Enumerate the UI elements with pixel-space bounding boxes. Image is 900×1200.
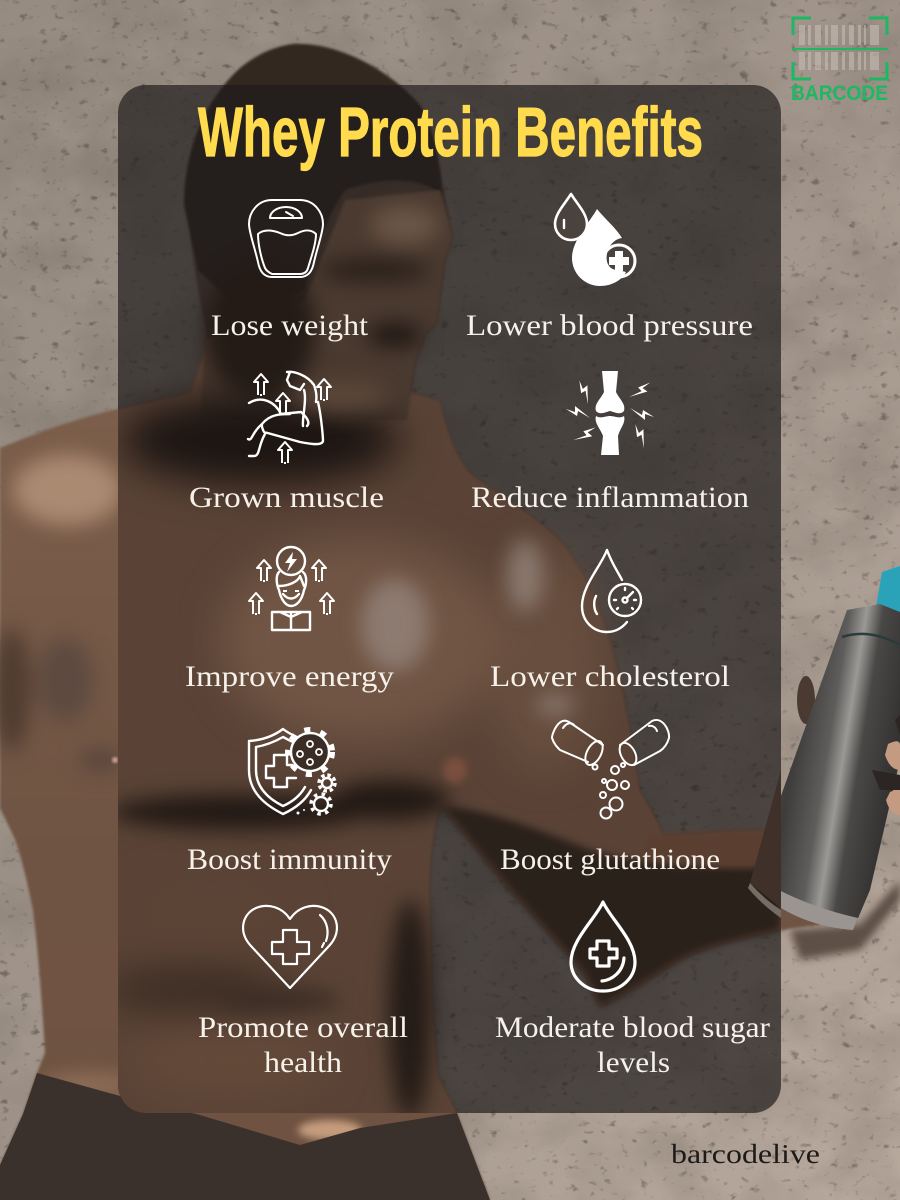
item: improve energy — [185, 547, 394, 693]
label: Improve energy — [185, 660, 394, 693]
logo: barcode: BARCODE — [791, 82, 888, 105]
icon: heart with cross — [243, 906, 337, 988]
brand name: barcodelive — [671, 1139, 820, 1169]
icon: flexed arm with arrows — [248, 372, 331, 463]
nipple — [112, 757, 118, 763]
label: Promote overall — [198, 1011, 408, 1044]
label: Lower blood pressure — [466, 309, 753, 342]
item: promote overall health — [198, 906, 408, 1079]
item: lower cholesterol — [490, 550, 730, 693]
shaker bottle — [750, 566, 900, 930]
item: boost glutathione — [500, 720, 720, 876]
shorts — [0, 1073, 490, 1200]
label: Boost immunity — [187, 843, 392, 876]
item: moderate blood sugar levels — [495, 902, 770, 1079]
head and neck — [190, 44, 453, 418]
shadow on wall behind hand — [797, 676, 815, 724]
icon: open capsule with bubbles — [552, 720, 669, 818]
hair — [184, 44, 442, 310]
item: grown muscle — [189, 372, 384, 514]
label: Boost glutathione — [500, 843, 720, 876]
icon: knee joint with bolts — [566, 371, 654, 455]
item: moderate blood sugar levels: levels — [597, 1046, 670, 1079]
bottle edge inside panel — [750, 770, 781, 908]
item: promote overall health: health — [264, 1046, 342, 1079]
item: boost immunity — [187, 729, 392, 876]
icon: drop with cross — [571, 902, 635, 991]
icon: person with energy bolt and arrows — [249, 547, 334, 630]
man shading inside panel — [118, 190, 781, 1113]
label: Grown muscle — [189, 481, 384, 514]
shadow on wall below bottle — [790, 880, 900, 960]
item: lower blood pressure — [466, 194, 753, 342]
skin lights and shadows — [0, 455, 140, 1095]
label: Lose weight — [211, 309, 369, 342]
item: reduce inflammation — [471, 371, 749, 514]
icon: shield with cross and virus — [249, 729, 335, 814]
icon: blood drops with plus — [555, 194, 635, 286]
item: lose weight — [211, 200, 369, 342]
chest highlights — [361, 539, 573, 715]
dark forearm and underarm — [440, 805, 781, 1007]
panel: translucent dark card — [118, 85, 781, 1113]
icon: drop with gauge — [582, 550, 641, 632]
logo: barcode — [791, 18, 888, 105]
label: Moderate blood sugar — [495, 1011, 770, 1044]
nipple in panel — [443, 757, 467, 783]
label: Lower cholesterol — [490, 660, 730, 693]
face shadows — [198, 288, 322, 397]
torso, shoulders and arm — [0, 340, 830, 1200]
bright skin above waistband — [298, 1120, 362, 1140]
icon: weighing scale — [249, 200, 323, 277]
label: Reduce inflammation — [471, 481, 749, 514]
